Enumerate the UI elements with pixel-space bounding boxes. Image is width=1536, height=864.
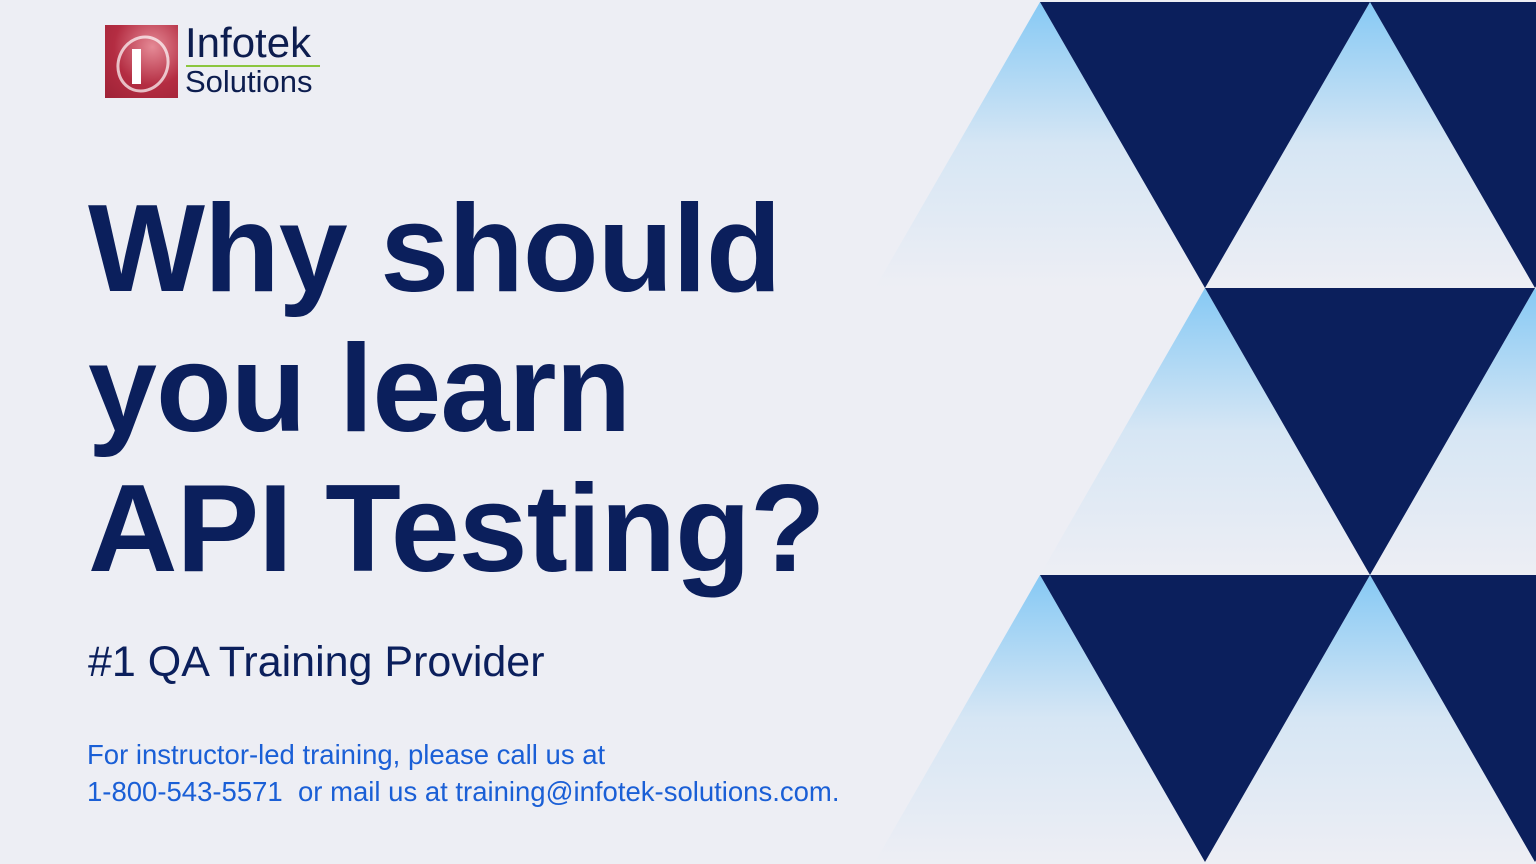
contact text bbox=[87, 739, 839, 807]
logo: Solutions bbox=[185, 64, 313, 99]
contact text: 1-800-543-5571 or mail us at training@infotek-solutions.com. bbox=[87, 776, 839, 807]
title: you learn bbox=[88, 320, 630, 458]
logo text: Infotek bbox=[185, 19, 311, 66]
title: Why should bbox=[88, 180, 781, 318]
icon: logo mark bbox=[105, 25, 178, 98]
contact text: For instructor-led training, please call us at bbox=[87, 739, 605, 770]
subtitle: #1 QA Training Provider bbox=[88, 638, 545, 686]
title bbox=[88, 180, 825, 598]
logo bbox=[105, 19, 320, 99]
title: API Testing? bbox=[88, 460, 825, 598]
